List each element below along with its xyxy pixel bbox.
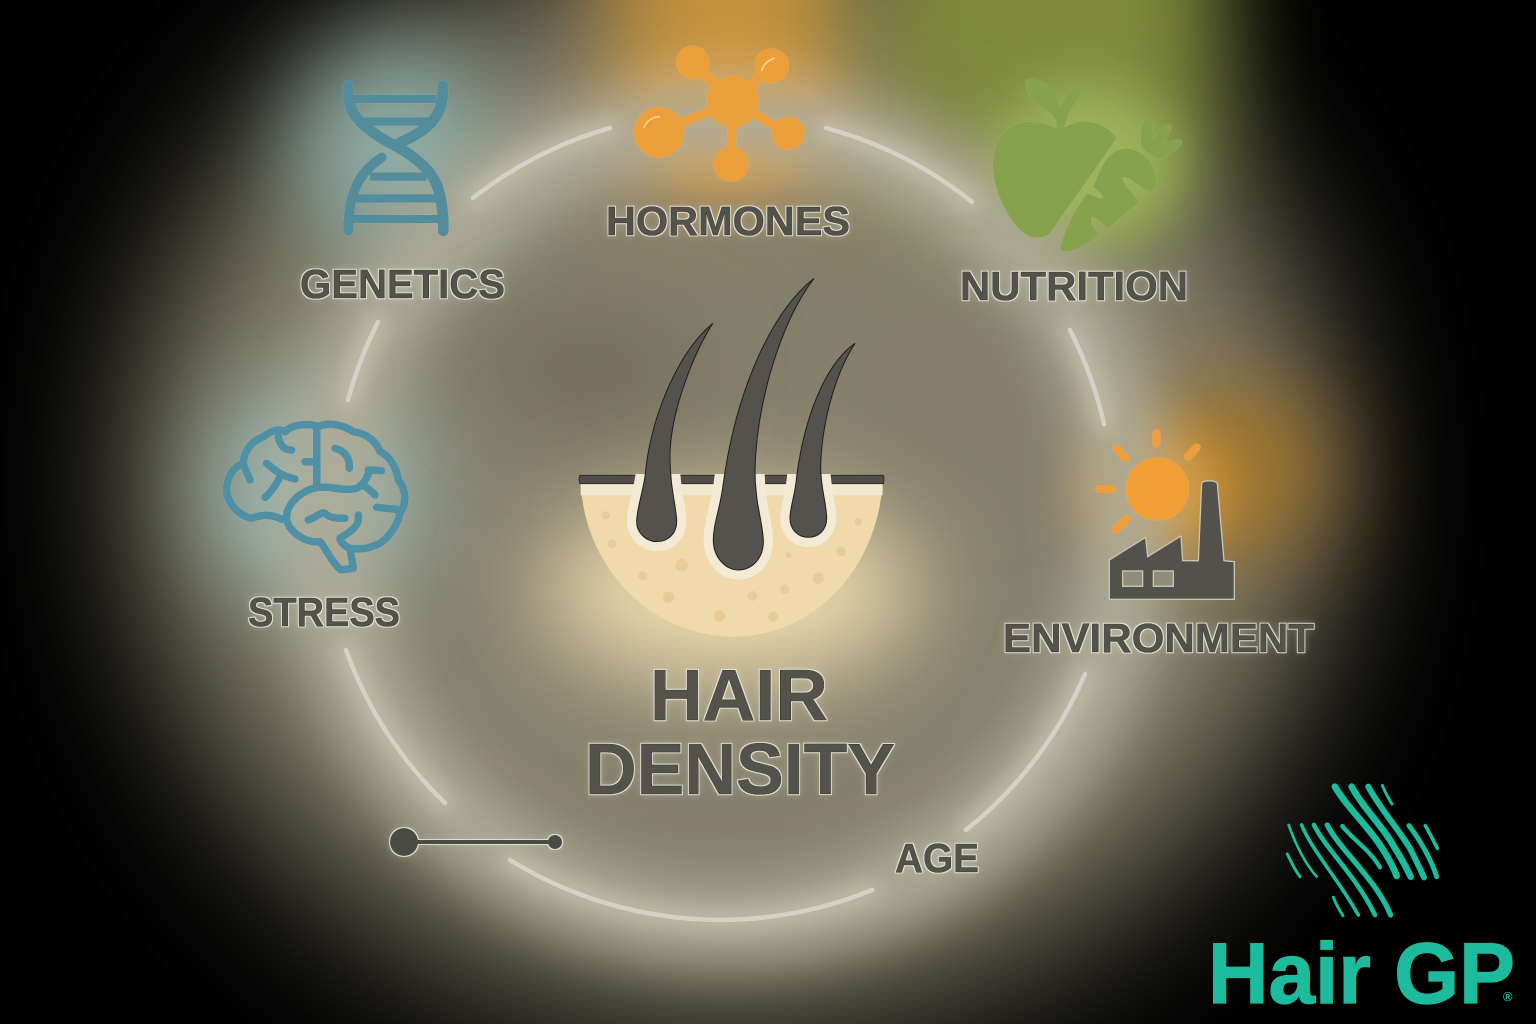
label: age: AGE — [895, 835, 979, 881]
sun — [1099, 433, 1197, 530]
icon: age timeline pin — [390, 828, 562, 856]
registered mark: ® — [1503, 989, 1513, 1004]
logo: Hair GP — [1208, 785, 1515, 1022]
factory — [1109, 481, 1234, 599]
icon: DNA helix — [348, 86, 443, 231]
label: nutrition: NUTRITION — [960, 263, 1188, 309]
title — [585, 656, 895, 810]
icon: apple and carrot — [993, 79, 1182, 252]
logo wordmark: Hair GP — [1208, 926, 1515, 1022]
icon: molecule — [634, 46, 805, 182]
icon: brain — [227, 424, 405, 570]
logo mark: hair-strand cross — [1287, 785, 1437, 916]
title: DENSITY — [585, 730, 895, 810]
scalp line — [579, 475, 884, 484]
label: stress: STRESS — [248, 589, 400, 635]
icon: sun and factory — [1099, 433, 1234, 599]
follicle sheaths — [627, 474, 836, 580]
hair strands — [637, 278, 855, 570]
label: hormones: HORMONES — [606, 198, 850, 244]
labels — [248, 198, 1314, 881]
label: genetics: GENETICS — [300, 261, 505, 307]
ring: segmented arcs — [346, 128, 1104, 920]
label: environment: ENVIRONMENT — [1003, 615, 1314, 661]
title: HAIR — [650, 656, 828, 736]
icon: hair follicle cross-section — [579, 278, 884, 637]
skin texture — [602, 511, 862, 622]
skin — [581, 483, 883, 637]
